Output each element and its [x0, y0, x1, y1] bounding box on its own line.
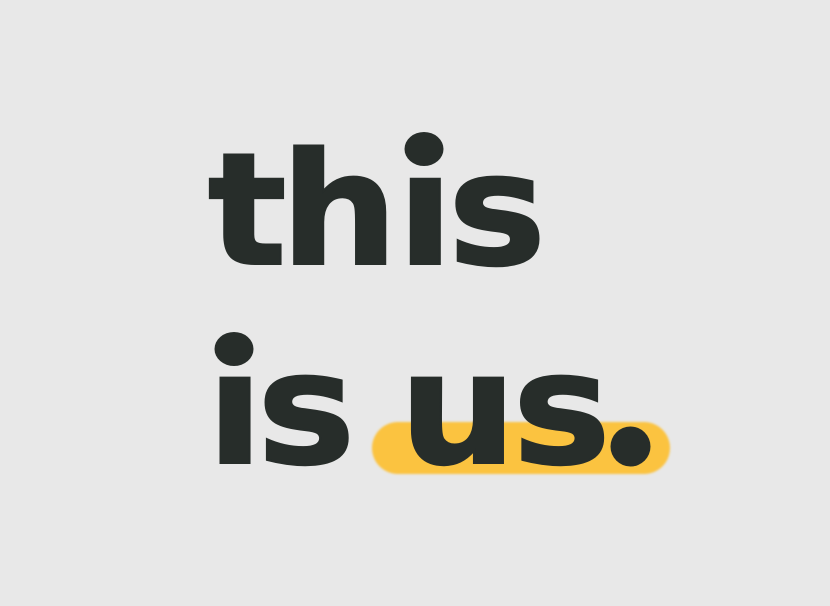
highlight pill [372, 422, 670, 474]
heading line: is us.: . [618, 402, 642, 472]
heading line: is us.: us [399, 318, 611, 500]
heading line: is us.: is [207, 318, 355, 500]
heading line: is us. [207, 318, 650, 500]
heading line: this: this [208, 119, 546, 301]
